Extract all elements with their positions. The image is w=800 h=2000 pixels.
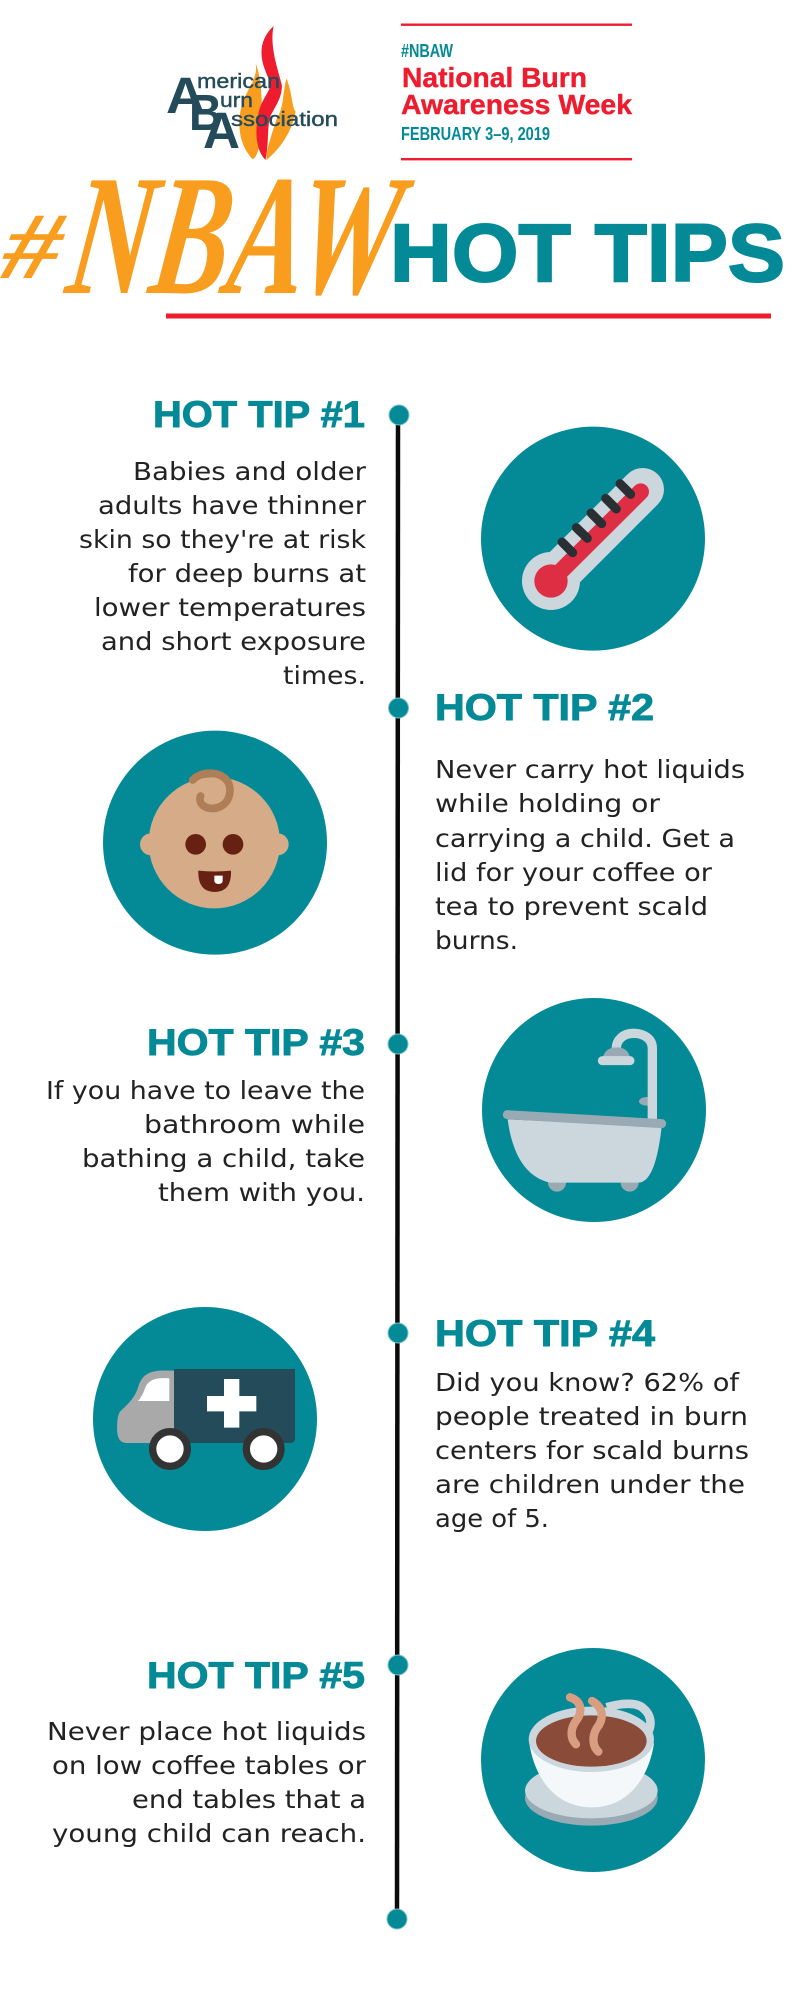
text: tip 1 xyxy=(79,457,367,690)
heading: tip 2: HOT TIP #2 xyxy=(435,687,654,728)
badge date: FEBRUARY 3–9, 2019 xyxy=(401,124,550,144)
text: tip 2: while holding or xyxy=(435,789,661,818)
text: tip 5: Never place hot liquids xyxy=(47,1717,366,1746)
badge title: National Burn xyxy=(402,62,587,93)
text: tip 1: skin so they're at risk xyxy=(79,525,367,554)
heading: tip 3: HOT TIP #3 xyxy=(147,1022,365,1063)
icon: coffee cup xyxy=(481,1648,705,1872)
logo letters: ssociation xyxy=(231,109,338,131)
text: tip 1: adults have thinner xyxy=(98,491,367,520)
text: tip 4 xyxy=(435,1368,749,1533)
logo letters: merican xyxy=(197,71,280,93)
text: tip 4: Did you know? 62% of xyxy=(435,1368,741,1397)
text: tip 4: are children under the xyxy=(435,1470,745,1499)
text: tip 3: them with you. xyxy=(158,1178,365,1207)
logo letters xyxy=(166,67,338,159)
text: tip 1: times. xyxy=(283,661,366,690)
text: tip 2: carrying a child. Get a xyxy=(435,824,735,853)
text: tip 5 xyxy=(47,1717,367,1848)
heading: tip 1: HOT TIP #1 xyxy=(153,394,365,435)
title xyxy=(0,140,785,330)
logo letters: B xyxy=(189,84,222,141)
icon: bathtub xyxy=(482,998,706,1222)
panel: hot tip 4 xyxy=(93,1307,749,1533)
text: tip 3: bathing a child, take xyxy=(82,1144,365,1173)
icon: ambulance xyxy=(93,1307,317,1531)
timeline xyxy=(387,405,409,1929)
icon: thermometer xyxy=(481,427,705,651)
text: tip 1: Babies and older xyxy=(133,457,367,486)
panel: hot tip 1 xyxy=(79,394,705,690)
script hashtag: NBAW xyxy=(57,140,421,330)
panel: hot tip 3 xyxy=(46,998,706,1222)
panel: hot tip 2 xyxy=(103,687,745,955)
icon: baby xyxy=(103,731,327,955)
logo letters: A xyxy=(166,67,205,124)
text: tip 5: young child can reach. xyxy=(52,1819,366,1848)
text: tip 5: end tables that a xyxy=(132,1785,366,1814)
text: tip 2: Never carry hot liquids xyxy=(435,755,745,784)
text: tip 2: burns. xyxy=(435,926,518,955)
badge title: Awareness Week xyxy=(401,89,632,120)
title words: HOT TIPS xyxy=(390,208,785,299)
text: tip 4: centers for scald burns xyxy=(435,1436,749,1465)
text: tip 4: people treated in burn xyxy=(435,1402,748,1431)
heading: tip 5: HOT TIP #5 xyxy=(147,1655,365,1696)
heading: tip 4: HOT TIP #4 xyxy=(435,1313,655,1354)
badge hashtag: #NBAW xyxy=(401,41,453,61)
text: tip 1: lower temperatures xyxy=(94,593,366,622)
text: tip 2: tea to prevent scald xyxy=(435,892,708,921)
text: tip 5: on low coffee tables or xyxy=(52,1751,367,1780)
panel: hot tip 5 xyxy=(47,1648,705,1872)
event badge: National Burn Awareness Week xyxy=(401,24,632,160)
text: tip 1: for deep burns at xyxy=(128,559,366,588)
badge title xyxy=(401,62,632,120)
logo letters: A xyxy=(203,102,240,159)
text: tip 2 xyxy=(435,755,745,955)
logo: American Burn Association xyxy=(166,26,338,160)
text: tip 3: If you have to leave the xyxy=(46,1076,365,1105)
text: tip 2: lid for your coffee or xyxy=(435,858,713,887)
logo letters: urn xyxy=(220,90,253,112)
text: tip 1: and short exposure xyxy=(101,627,366,656)
text: tip 3 xyxy=(46,1076,365,1207)
text: tip 4: age of 5. xyxy=(435,1504,549,1533)
icon: flame xyxy=(239,26,296,160)
text: tip 3: bathroom while xyxy=(144,1110,365,1139)
